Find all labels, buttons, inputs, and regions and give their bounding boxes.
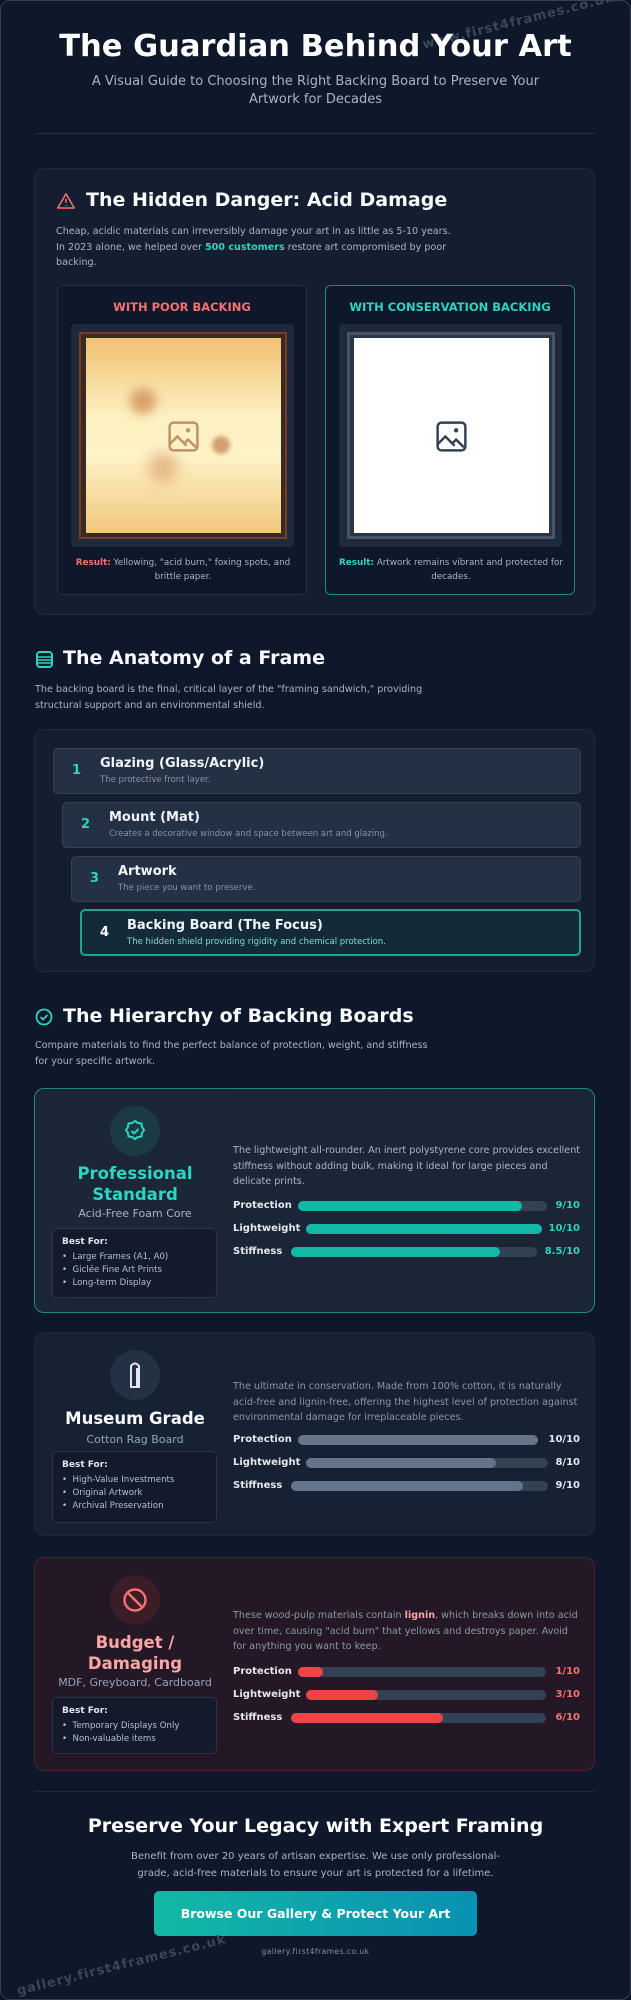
icon: warning [57,193,75,209]
best for: Best For: [62,1460,108,1470]
icon: layers [36,651,53,668]
image: clean paper [339,324,562,547]
rating bars: Protection [233,1200,292,1211]
rating bars: Stiffness [233,1480,282,1491]
rating bars: 8.5/10 [545,1246,580,1257]
layer 1: 1 [72,763,81,778]
layer 2: Mount (Mat) [109,810,200,825]
sub-panel: poor backing [57,285,307,595]
layer 3: 3 [90,871,99,886]
layer 1 [53,748,581,794]
best for: • Giclée Fine Art Prints [62,1265,162,1275]
rating bars: 3/10 [555,1689,580,1700]
best for: • Original Artwork [62,1488,142,1498]
card: museum grade [34,1332,595,1536]
icon: check circle [36,1008,52,1026]
rating bars [233,1434,580,1491]
title: Budget / Damaging [88,1633,182,1673]
layer 3: The piece you want to preserve. [118,883,255,893]
description: These wood-pulp materials contain lignin, which breaks down into acid over time, causing "acid burn" that yellows and destroys paper. Avoid for anything you want to keep. [233,1610,578,1652]
best for [52,1451,217,1523]
layer 1: The protective front layer. [100,775,210,785]
rating bars: Stiffness [233,1246,282,1257]
card: museum grade: Cotton Rag Board [86,1433,184,1446]
rating bars: 1/10 [555,1666,580,1677]
rating bars: Lightweight [233,1223,300,1234]
rating bars [233,1200,580,1257]
icon: badge check [110,1106,160,1156]
intro text: Cheap, acidic materials can irreversibly damage your art in as little as 5-10 years. In 2023 alone, we helped over 500 customers restore art compromised by poor backing. [56,226,451,268]
title: Museum Grade [65,1409,205,1428]
best for: • High-Value Investments [62,1475,174,1485]
rating bars: 9/10 [555,1480,580,1491]
best for: • Temporary Displays Only [62,1721,179,1731]
layer 2: Creates a decorative window and space between art and glazing. [109,829,388,839]
description: The lightweight all-rounder. An inert polystyrene core provides excellent stiffness without adding bulk, making it ideal for large pieces and delicate prints. [233,1145,580,1187]
text: anatomy intro: The backing board is the final, critical layer of the "framing sandwich," providing structural support and an environmental shield. [35,684,422,710]
rating bars: Protection [233,1434,292,1445]
layer 2: 2 [81,817,90,832]
layer 3 [71,856,581,902]
best for: • Archival Preservation [62,1501,164,1511]
rating bars: Lightweight [233,1689,300,1700]
layer 4: Backing Board (The Focus) [127,918,323,933]
rating bars: Lightweight [233,1457,300,1468]
layer 4: 4 [100,925,109,940]
result text: Result: Yellowing, "acid burn," foxing spots, and brittle paper. [76,558,290,582]
text: hierarchy intro: Compare materials to find the perfect balance of protection, weight, and stiffness for your specific artwork. [35,1040,427,1066]
panel: acid damage [34,168,595,615]
best for: • Large Frames (A1, A0) [62,1252,168,1262]
rating bars: 9/10 [555,1200,580,1211]
CTA text: Benefit from over 20 years of artisan expertise. We use only professional-grade, acid-free materials to ensure your art is protected for a lifetime. [131,1851,500,1879]
rating bars: 6/10 [555,1712,580,1723]
heading: hierarchy: The Hierarchy of Backing Boards [63,1005,414,1027]
rating bars: 8/10 [555,1457,580,1468]
footer url: gallery.first4frames.co.uk [262,1947,370,1956]
CTA button [154,1891,477,1936]
sub-panel: conservation backing [325,285,575,595]
panel: frame layers [34,729,595,972]
description: The ultimate in conservation. Made from 100% cotton, it is naturally acid-free and lignin-free, offering the highest level of protection against environmental damage for irreplaceable pieces. [233,1381,577,1423]
layer 3: Artwork [118,864,177,879]
best for [52,1697,217,1754]
best for [52,1228,217,1298]
rating bars: Stiffness [233,1712,282,1723]
rating bars: 10/10 [549,1434,580,1445]
watermark bottom: gallery.first4frames.co.uk [15,1932,228,1999]
card: budget / damaging [34,1557,595,1771]
best for: • Non-valuable items [62,1734,156,1744]
result text: Result: Artwork remains vibrant and protected for decades. [339,558,563,582]
rating bars: Protection [233,1666,292,1677]
icon: cotton roll [110,1350,160,1400]
CTA heading: Preserve Your Legacy with Expert Framing [88,1815,543,1837]
best for: Best For: [62,1706,108,1716]
heading: The Hidden Danger: Acid Damage [86,189,447,211]
rating bars: 10/10 [549,1223,580,1234]
layer 1: Glazing (Glass/Acrylic) [100,756,264,771]
layer 2 [62,802,581,848]
sub-panel: conservation backing: WITH CONSERVATION BACKING [349,300,551,314]
CTA button: Browse Our Gallery & Protect Your Art [181,1906,450,1921]
title: The Guardian Behind Your Art [59,29,572,64]
subtitle: A Visual Guide to Choosing the Right Backing Board to Preserve Your Artwork for Decades [92,74,539,107]
layer 4: The hidden shield providing rigidity and chemical protection. [127,937,386,947]
best for: • Long-term Display [62,1278,151,1288]
image: yellowed paper [71,324,294,547]
title: Professional Standard [77,1164,193,1204]
icon: prohibited [110,1575,160,1625]
card: budget / damaging: MDF, Greyboard, Cardboard [58,1676,212,1689]
card: professional standard [34,1088,595,1313]
card: professional standard: Acid-Free Foam Core [78,1207,192,1220]
heading: anatomy: The Anatomy of a Frame [63,647,325,669]
layer 4 [80,909,581,956]
best for: Best For: [62,1237,108,1247]
rating bars [233,1666,580,1723]
sub-panel: poor backing: WITH POOR BACKING [113,300,251,314]
